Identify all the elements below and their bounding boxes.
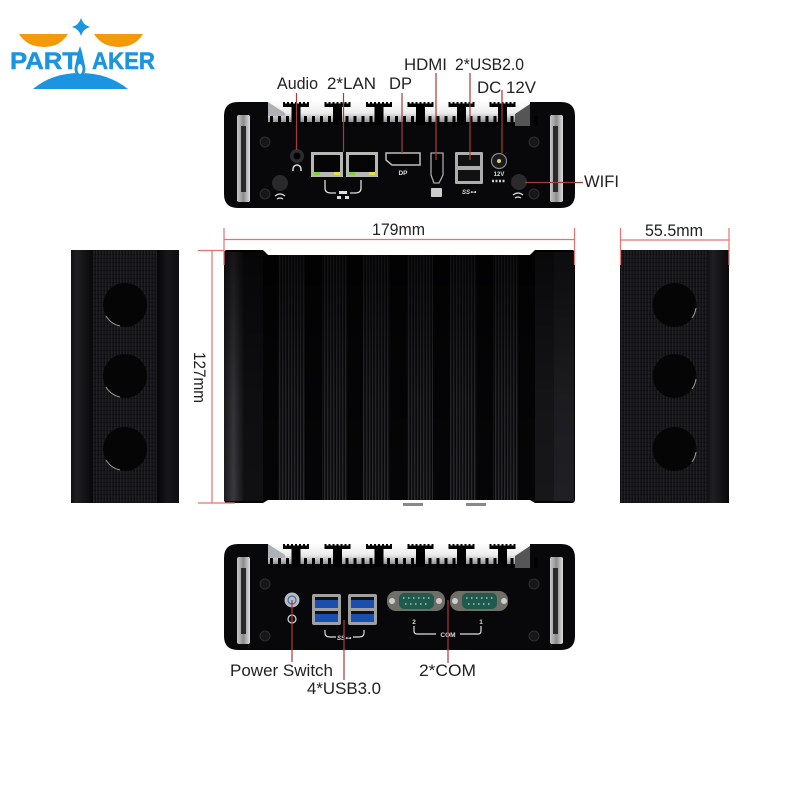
icon: audio jack bbox=[290, 149, 304, 171]
hole 3 bbox=[103, 427, 147, 471]
hole 3 bbox=[652, 427, 696, 471]
chassis bbox=[224, 543, 575, 650]
LAN port 1 bbox=[311, 152, 343, 177]
icon: right scale bowl bbox=[94, 34, 143, 47]
ribbed area bbox=[620, 250, 707, 503]
dimension: 55.5mm bbox=[620, 221, 729, 265]
left edge bbox=[224, 252, 245, 501]
leader lines bbox=[296, 73, 583, 182]
side body bbox=[620, 250, 729, 503]
panel: top view bbox=[224, 250, 575, 506]
USB 2.0 ports: SS⊶ bbox=[462, 190, 477, 196]
DC jack bbox=[492, 154, 506, 181]
icon: mast bbox=[75, 46, 85, 76]
COM bracket: COM bbox=[440, 632, 456, 639]
callouts: front ports bbox=[230, 600, 476, 698]
callouts: rear ports bbox=[277, 55, 619, 191]
shading bbox=[224, 250, 575, 503]
HDMI port bbox=[431, 153, 443, 197]
icon: antenna right bbox=[511, 174, 527, 198]
logo text left: PART bbox=[10, 48, 78, 75]
right edge bbox=[535, 252, 554, 501]
dimension: 179mm bbox=[224, 220, 575, 265]
left edge 2 bbox=[245, 252, 263, 501]
hole 2 bbox=[103, 354, 147, 398]
hole 1 bbox=[652, 283, 696, 327]
COM port 2 bbox=[387, 591, 445, 611]
power button bbox=[284, 592, 300, 623]
USB 3.0 stack 2 bbox=[348, 594, 377, 625]
hole 2 bbox=[652, 354, 696, 398]
label: 2*USB2.0: 2*USB2.0 bbox=[455, 55, 524, 74]
COM bracket bbox=[412, 619, 483, 639]
dimension: 127mm: 127mm bbox=[190, 352, 209, 403]
USB 2.0 ports bbox=[455, 152, 483, 196]
dimension: 55.5mm: 55.5mm bbox=[645, 221, 703, 240]
DP port: DP bbox=[398, 170, 408, 177]
panel: right side view bbox=[620, 250, 729, 503]
right edge 2 bbox=[554, 252, 574, 501]
icon: star bbox=[72, 18, 90, 36]
label: Audio: Audio bbox=[277, 74, 318, 93]
dimension: 179mm: 179mm bbox=[372, 220, 425, 239]
COM bracket: 2 bbox=[412, 619, 416, 626]
body bbox=[224, 250, 575, 503]
COM port 1 bbox=[450, 591, 508, 611]
label: DC 12V: DC 12V bbox=[477, 78, 537, 97]
chassis bbox=[224, 101, 575, 208]
icon: dome base bbox=[33, 73, 128, 89]
USB bracket bbox=[325, 630, 364, 642]
side body bbox=[71, 250, 179, 503]
label: 2*COM: 2*COM bbox=[419, 661, 476, 680]
ribs bbox=[278, 255, 518, 500]
label: 2*LAN: 2*LAN bbox=[327, 74, 376, 93]
COM bracket: 1 bbox=[479, 619, 483, 626]
USB 3.0 stack 1 bbox=[312, 594, 341, 625]
label: DP: DP bbox=[389, 74, 412, 93]
DP port bbox=[386, 153, 420, 177]
hole 1 bbox=[103, 283, 147, 327]
LAN port 2 bbox=[346, 152, 378, 177]
label: 4*USB3.0: 4*USB3.0 bbox=[307, 679, 381, 698]
logo text right: AKER bbox=[92, 48, 155, 75]
panel: front I/O view bbox=[224, 543, 575, 650]
bottom connector glints bbox=[403, 503, 486, 506]
logo: Partaker bbox=[10, 18, 155, 89]
LAN bracket and icon bbox=[325, 180, 361, 199]
icon: antenna left bbox=[272, 175, 288, 199]
label: WIFI: WIFI bbox=[584, 172, 619, 191]
smooth strip bbox=[707, 250, 729, 503]
USB bracket: SS⊶ bbox=[337, 636, 352, 642]
smooth strip bbox=[71, 250, 93, 503]
leader lines bbox=[292, 600, 448, 680]
icon: left scale bowl bbox=[19, 34, 68, 47]
panel: left side view bbox=[71, 250, 179, 503]
label: Power Switch: Power Switch bbox=[230, 661, 333, 680]
panel: rear I/O view bbox=[224, 101, 575, 208]
label: HDMI: HDMI bbox=[404, 55, 447, 74]
dimension: 127mm bbox=[190, 250, 235, 503]
right strip bbox=[157, 250, 179, 503]
icon: mast highlight bbox=[78, 64, 82, 74]
ribbed area bbox=[93, 250, 157, 503]
DC jack: 12V bbox=[494, 172, 504, 178]
